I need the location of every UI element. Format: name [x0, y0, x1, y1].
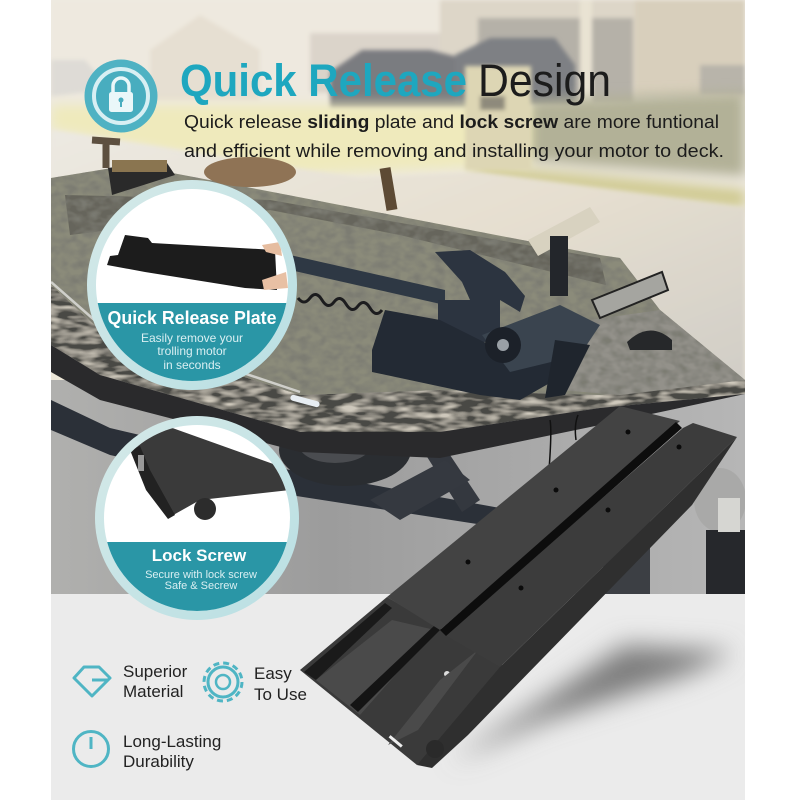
motor shaft: [290, 255, 445, 305]
mounting holes: [466, 430, 682, 590]
callout body: Secure with lock screw: [145, 569, 257, 581]
title: Quick Release: [180, 55, 467, 106]
trolling motor: [372, 250, 600, 400]
icon: clock: [74, 732, 108, 766]
hull underside: [51, 345, 745, 458]
callout body: [145, 569, 257, 592]
boat gunwale: [65, 195, 606, 285]
title suffix: Design: [478, 55, 611, 106]
top plate left: [387, 406, 680, 630]
center slot: [440, 422, 682, 636]
callout body: Easily remove your: [141, 331, 243, 345]
side wall: [417, 437, 737, 768]
panel: boat photo background: [51, 0, 746, 594]
cables: [549, 415, 578, 470]
callout: quick release plate: [87, 180, 297, 393]
boat hull side: [51, 285, 745, 432]
callout plate image: [96, 235, 288, 393]
trailer frame and wheel: [51, 400, 746, 594]
callout heading: Quick Release Plate: [108, 308, 276, 328]
callout body: trolling motor: [157, 344, 227, 358]
label: Durability: [123, 752, 194, 771]
callout screw image: [104, 420, 290, 614]
lock badge icon: [84, 60, 158, 132]
lawn and road: [51, 92, 745, 208]
boat deck camouflage: [51, 165, 745, 395]
product: quick release plate: [300, 406, 737, 768]
label: Material: [123, 682, 183, 701]
label: To Use: [254, 685, 307, 704]
coiled cable: [298, 294, 382, 314]
lower sliding rail: [300, 597, 510, 765]
plate shadow: [450, 645, 735, 762]
nav light: [627, 330, 672, 350]
subtitle line 1: Quick release sliding plate and lock screw are more funtional: [184, 111, 719, 132]
feature: long-lasting durability: [74, 732, 221, 771]
bow camo: [560, 310, 745, 395]
icon: diamond: [74, 667, 110, 696]
ground and concrete: [51, 380, 745, 594]
feature: easy to use: [204, 663, 307, 704]
bow light: [290, 394, 320, 408]
bottom gray panel: [51, 594, 745, 800]
lock knob: [426, 740, 444, 758]
light bar: [592, 272, 668, 318]
label: Easy: [254, 664, 292, 683]
fishing seats: [92, 140, 392, 210]
mailbox pillar: [465, 66, 531, 170]
callout body: Safe & Secrew: [165, 580, 237, 592]
callout body: [141, 331, 243, 372]
house background: [150, 0, 745, 102]
fish finder: [528, 207, 600, 296]
callout body: in seconds: [163, 358, 221, 372]
subtitle line 2: and efficient while removing and installing your motor to deck.: [184, 140, 724, 161]
label: Long-Lasting: [123, 732, 221, 751]
callout heading: Lock Screw: [152, 546, 247, 565]
label: Superior: [123, 662, 188, 681]
rail grooves: [304, 603, 478, 748]
parked cars: [51, 38, 575, 108]
top plate right: [445, 423, 737, 667]
icon: gear: [204, 663, 242, 701]
hull white trim: [51, 282, 300, 392]
driveway: [51, 130, 745, 400]
callout: lock screw: [95, 416, 299, 620]
feature: superior material: [74, 662, 188, 701]
